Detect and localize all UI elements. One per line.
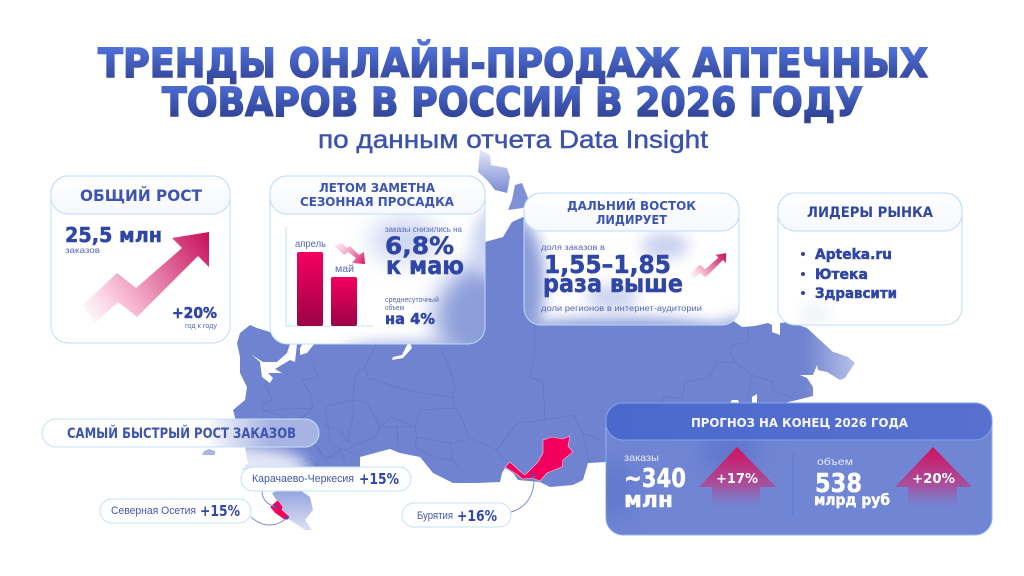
panel: прогноз — [597, 403, 992, 535]
value: orders forecast: ~340 — [624, 464, 686, 494]
panel header: ДАЛЬНИЙ ВОСТОК — [567, 198, 697, 213]
Caucasus — [272, 488, 313, 530]
panel header — [606, 403, 992, 440]
callout: North Ossetia: +15% — [200, 502, 240, 520]
bar chart: апрель — [295, 239, 326, 250]
value: million: млн — [624, 488, 673, 513]
value: times higher: раза выше — [543, 269, 683, 298]
map of Russia — [168, 150, 855, 530]
pill: fastest order growth — [42, 419, 319, 447]
callout: Buryatia: Бурятия — [417, 510, 453, 522]
panel header — [270, 176, 485, 214]
callout: North Ossetia — [100, 499, 251, 523]
callout: Karachay-Cherkessia: +15% — [359, 470, 399, 488]
panel header: СЕЗОННАЯ ПРОСАДКА — [300, 194, 454, 209]
connector lines — [251, 473, 535, 525]
value: 4%: на 4% — [385, 310, 435, 328]
callout: Karachay-Cherkessia: Карачаево-Черкесия — [252, 473, 354, 485]
value: 6,8%: 6,8% — [385, 232, 454, 260]
panel glow — [606, 440, 756, 527]
icon: small growth arrow — [690, 253, 726, 279]
region: Buryatia — [505, 436, 573, 481]
panel header: ЛИДЕРЫ РЫНКА — [807, 205, 933, 221]
caption: regional audience: доли регионов в интернет-аудитории — [541, 304, 702, 313]
glass blur behind the panel — [524, 220, 738, 324]
caption: volume: объем — [817, 456, 853, 468]
caption: orders: заказы — [624, 452, 659, 464]
mainland — [233, 217, 855, 487]
regional borders — [255, 327, 793, 470]
title: ТОВАРОВ В РОССИИ В 2026 ГОДУ — [162, 80, 863, 126]
panel: общий рост — [51, 176, 230, 343]
list of market leaders — [801, 247, 897, 302]
panel header: ПРОГНОЗ НА КОНЕЦ 2026 ГОДА — [691, 415, 908, 430]
inland seas — [252, 343, 757, 403]
callout: Buryatia: +16% — [457, 507, 497, 525]
value: growth: +20% — [172, 304, 217, 322]
panel: лидеры рынка — [778, 193, 962, 325]
region: North Ossetia and Karachay-Cherkessia — [270, 500, 290, 520]
panel header: ЛЕТОМ ЗАМЕТНА — [319, 180, 435, 195]
arrow: +17% — [699, 447, 776, 512]
bar chart — [286, 227, 373, 326]
caption: share of orders: доля заказов в — [541, 243, 605, 252]
arrow: +17%: +17% — [716, 472, 758, 487]
arrow: +20%: +20% — [912, 472, 955, 487]
title — [98, 39, 928, 126]
arrow: +20% — [895, 447, 972, 512]
glass blur behind the panel — [340, 206, 484, 344]
callout: North Ossetia: Северная Осетия — [111, 505, 196, 517]
icon: growth arrow — [83, 232, 209, 323]
callout: Karachay-Cherkessia — [241, 467, 411, 491]
caption: volume: объем — [385, 303, 404, 312]
icon: falling arrow — [334, 243, 365, 264]
value: volume forecast: 538 — [815, 469, 862, 499]
panel header — [524, 193, 739, 231]
subtitle: по данным отчета Data Insight — [318, 126, 708, 154]
value: to May: к маю — [386, 251, 464, 280]
list of market leaders: Ютека — [815, 267, 868, 283]
panel header — [778, 193, 962, 231]
value: range: 1,55–1,85 — [544, 250, 671, 279]
divider — [792, 454, 794, 516]
caption: orders fell: заказы снизились на — [385, 225, 463, 234]
faded south-west of the map — [241, 448, 316, 470]
value: orders: 25,5 млн — [65, 223, 162, 247]
caption: daily volume: среднесуточный — [385, 295, 439, 304]
caption: year over year: год к году — [185, 323, 218, 330]
list of market leaders: Apteka.ru — [815, 247, 892, 263]
pill: fastest order growth: САМЫЙ БЫСТРЫЙ РОСТ ЗАКАЗОВ — [67, 425, 296, 442]
caption: orders: заказов — [65, 245, 101, 255]
Crimea — [202, 449, 215, 455]
panel header: ЛИДИРУЕТ — [596, 212, 667, 227]
panel header — [51, 176, 230, 214]
islands in the Arctic — [478, 150, 528, 210]
value: billion rubles: млрд руб — [814, 491, 890, 509]
bar chart: май — [335, 264, 354, 275]
list of market leaders: Здравсити — [815, 286, 897, 302]
panel header: ОБЩИЙ РОСТ — [80, 186, 202, 205]
callout: Buryatia — [402, 503, 511, 527]
panel: сезонная просадка — [270, 176, 486, 344]
panel: дальний восток — [524, 192, 740, 326]
title: ТРЕНДЫ ОНЛАЙН-ПРОДАЖ АПТЕЧНЫХ — [98, 39, 928, 87]
glass blur behind the panel — [804, 306, 826, 322]
